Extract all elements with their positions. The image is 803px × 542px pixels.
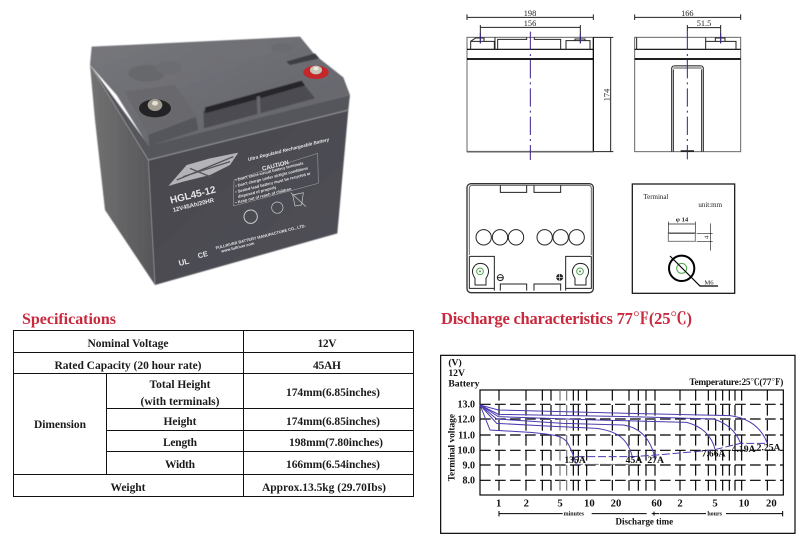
terminal top view: M6	[704, 280, 714, 287]
curve 135A	[480, 405, 577, 465]
top view	[467, 184, 593, 293]
terminal side view	[668, 217, 713, 251]
battery label: 12V45Ah/20HR	[172, 198, 215, 214]
discharge chart	[441, 355, 795, 533]
width dimension 166	[635, 9, 741, 20]
temperature label: Temperature:25℃(77℉)	[689, 377, 783, 388]
y axis labels: 11.0	[458, 430, 475, 441]
curve labels: 135A	[564, 455, 586, 466]
width dimension 198	[467, 9, 593, 20]
caution box: • Don't charge under airtight conditions	[235, 165, 309, 188]
heading: specifications: Specifications	[22, 311, 116, 328]
row: total height: 174mm(6.85inches)	[286, 387, 380, 399]
battery label	[168, 137, 330, 268]
curve 2.25A	[480, 405, 767, 443]
row: total height	[140, 379, 380, 408]
row: nominal voltage: Nominal Voltage	[88, 338, 168, 350]
curve labels: 27A	[647, 455, 664, 466]
heading: discharge characteristics: Discharge characteristics 77℉(25℃)	[441, 309, 692, 328]
width dimension 156	[480, 19, 580, 43]
row: height	[164, 416, 380, 428]
row label: dimension: Dimension	[34, 419, 87, 431]
unit label: (V)	[448, 358, 462, 369]
row: width: Width	[165, 459, 196, 471]
row: length	[163, 437, 383, 449]
curve 45A	[480, 405, 633, 458]
unit label	[448, 358, 480, 389]
row: width: 166mm(6.54inches)	[286, 459, 380, 471]
x axis title: Discharge time	[616, 517, 673, 527]
row: height: Height	[164, 416, 197, 428]
certification marks: UL	[178, 257, 190, 268]
caution box: • Keep out of reach of children	[235, 186, 292, 205]
row: length: Length	[163, 437, 198, 449]
row: total height: (with terminals)	[140, 396, 220, 408]
y axis labels: 10.0	[458, 446, 475, 457]
curve labels	[564, 443, 781, 466]
height dimension 174: 174	[602, 88, 611, 101]
row: rated capacity: Rated Capacity (20 hour rate)	[54, 360, 202, 372]
row: weight: Approx.13.5kg (29.70Ibs)	[262, 482, 386, 494]
unit label: 12V	[448, 368, 465, 379]
chart frame	[441, 355, 795, 533]
table grid	[13, 330, 414, 497]
side view	[635, 9, 741, 159]
center lines	[480, 32, 580, 160]
dimension 51.5: 51.5	[697, 19, 711, 28]
y axis labels: 8.0	[463, 476, 475, 487]
time scale: hours	[707, 512, 723, 518]
row: nominal voltage	[88, 338, 337, 350]
width dimension 198: 198	[524, 9, 536, 18]
curve labels: 45A	[626, 455, 642, 466]
specifications table	[13, 330, 414, 497]
battery left side	[90, 65, 155, 285]
width dimension 166: 166	[681, 9, 694, 18]
y axis labels	[458, 400, 475, 487]
row: length: 198mm(7.80inches)	[289, 437, 383, 449]
row: weight	[110, 482, 386, 494]
recycling symbols	[244, 193, 306, 223]
terminal side view: 4	[704, 235, 711, 239]
end voltage line	[577, 443, 767, 457]
discharge curves	[480, 405, 767, 465]
side view grip	[672, 66, 703, 152]
row: total height: Total Height	[150, 379, 211, 391]
x axis labels: 10	[739, 498, 749, 509]
end voltage grey line	[577, 463, 633, 466]
y axis labels: 9.0	[463, 460, 475, 471]
row: nominal voltage: 12V	[318, 338, 337, 350]
plot area	[480, 390, 783, 495]
caution box: • Don't short-circuit battery terminals	[235, 160, 305, 182]
height dimension 174	[593, 37, 613, 152]
terminal side view: φ 14	[676, 217, 689, 224]
curve labels: 2.25A	[757, 443, 781, 454]
unit label: Battery	[448, 378, 480, 389]
battery lid	[90, 37, 350, 160]
model name: HGL45-12	[169, 185, 217, 207]
manufacturer text: FULLRIVER BATTERY MANUFACTURE CO., LTD.	[215, 223, 306, 250]
terminal detail box: unit:mm	[698, 201, 723, 209]
negative terminal	[139, 99, 171, 117]
battery front face	[148, 110, 348, 285]
x axis labels: 2	[524, 498, 529, 509]
caution box: • Sealed lead battery must be recycled or	[235, 171, 312, 194]
y axis title: Terminal voltage	[447, 414, 457, 481]
x axis labels: 5	[557, 498, 563, 509]
x axis labels: 2	[677, 498, 683, 509]
brand wing logo	[168, 153, 238, 186]
row: width	[165, 459, 380, 471]
x axis labels: 1	[496, 498, 501, 509]
time scale: minutes	[564, 512, 585, 518]
curve labels: 7.66A	[702, 449, 726, 460]
x axis labels: 60	[651, 498, 662, 509]
x axis labels: 20	[766, 498, 777, 509]
negative mark	[497, 275, 503, 281]
positive mark	[556, 274, 563, 281]
battery label: CE	[197, 249, 209, 260]
row: height: 174mm(6.85inches)	[286, 416, 380, 428]
terminal detail box	[632, 184, 735, 293]
curve 4.19A	[480, 405, 741, 443]
row: weight: Weight	[110, 482, 146, 494]
drawing: front and side views	[467, 9, 741, 160]
x axis labels: 10	[584, 498, 595, 509]
width dimension 156: 156	[524, 19, 536, 28]
front view	[467, 9, 613, 160]
slogan: Ultra Regulated Rechargeable Battery	[247, 137, 330, 162]
battery photo	[90, 37, 350, 285]
caution box: CAUTION	[262, 160, 290, 173]
dimension 51.5	[687, 19, 721, 43]
time scale	[499, 511, 783, 518]
x axis labels	[496, 498, 777, 509]
x axis labels: 20	[611, 498, 621, 509]
curve 27A	[480, 405, 655, 458]
curve labels: 4.19A	[732, 444, 756, 455]
terminal detail box: Terminal	[643, 193, 669, 201]
curve 7.66A	[480, 405, 715, 449]
caution box	[233, 153, 318, 206]
caution box: disposed of properly	[237, 184, 278, 199]
positive terminal	[303, 66, 329, 79]
x axis labels: 5	[712, 498, 718, 509]
battery label: www.fullriver.com	[220, 240, 255, 254]
row: rated capacity: 45AH	[313, 360, 341, 372]
row: rated capacity	[54, 360, 341, 372]
drawing: top view and terminal	[467, 184, 735, 293]
y axis labels: 13.0	[458, 400, 475, 411]
y axis labels: 12.0	[458, 415, 475, 426]
